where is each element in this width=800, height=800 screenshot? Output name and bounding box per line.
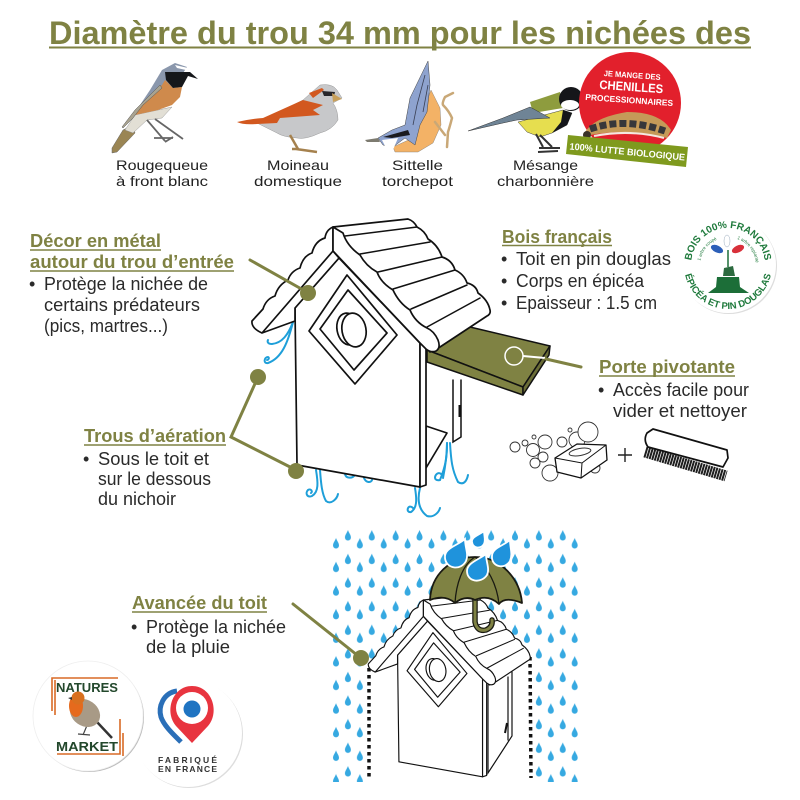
- pivoting door: [427, 327, 550, 395]
- callout: avancée du toit: Protège la nichée: [146, 617, 286, 637]
- bird: sittelle torchepot: [365, 61, 453, 152]
- callout: décor en métal: Décor en métal: [30, 231, 161, 251]
- badge: bois 100% français: 1 arbre coupé: [698, 237, 716, 260]
- callout: porte pivotante: [598, 357, 749, 421]
- badge: bois 100% français: 1 arbre replanté: [738, 236, 759, 262]
- badge: bois 100% français: ÉPICÉA ET PIN DOUGLAS: [685, 273, 770, 309]
- icon: soap and bubbles: [510, 422, 607, 481]
- leader: porte pivotante: [505, 347, 581, 367]
- badge text: PROCESSIONNAIRES: [585, 92, 674, 108]
- label: Rougequeue à front blanc: Rougequeue: [116, 157, 208, 173]
- callout: porte pivotante: •: [598, 380, 604, 400]
- callout: décor en métal: •: [29, 274, 35, 294]
- plus sign: [618, 448, 632, 462]
- label: Rougequeue à front blanc: à front blanc: [116, 173, 208, 189]
- badge: bois 100% français: [684, 221, 777, 314]
- callout: trous d'aération: •: [83, 449, 89, 469]
- icon: brush: [645, 429, 728, 476]
- callout: porte pivotante: vider et nettoyer: [613, 401, 747, 421]
- umbrella: [430, 557, 522, 630]
- label: Mésange charbonnière: [497, 157, 594, 189]
- callout: trous d'aération: [83, 426, 226, 509]
- orange frame: [52, 678, 123, 756]
- leader: avancée du toit: [293, 604, 369, 666]
- label: Rougequeue à front blanc: [116, 157, 208, 189]
- callout: décor en métal: certains prédateurs: [44, 295, 200, 315]
- callout: bois français: Toit en pin douglas: [516, 249, 671, 269]
- rain pattern: [330, 528, 581, 782]
- badge: fabriqué en france: FABRIQUÉ: [158, 755, 217, 765]
- callout: porte pivotante: Porte pivotante: [599, 357, 735, 377]
- badge: natures market: [33, 661, 144, 772]
- callout: décor en métal: Protège la nichée de: [44, 274, 208, 294]
- callout: décor en métal: [29, 231, 234, 336]
- callout: bois français: Corps en épicéa: [516, 271, 645, 291]
- badge: fabriqué en france: EN FRANCE: [158, 764, 217, 774]
- label: Sittelle torchepot: torchepot: [382, 173, 453, 189]
- banner: 100% lutte biologique: 100% LUTTE BIOLOGIQUE: [569, 141, 685, 164]
- callout: décor en métal: (pics, martres...): [44, 316, 168, 336]
- label: Sittelle torchepot: [382, 157, 453, 189]
- badge text: [585, 69, 674, 108]
- badge: fabriqué en france: [134, 679, 243, 788]
- label: Moineau domestique: [254, 157, 342, 189]
- callout: trous d'aération: sur le dessous: [98, 469, 211, 489]
- label: Moineau domestique: domestique: [254, 173, 342, 189]
- callout: avancée du toit: [131, 593, 286, 657]
- callout: bois français: •: [501, 249, 507, 269]
- caterpillar: [583, 112, 671, 139]
- callout: trous d'aération: du nichoir: [98, 489, 176, 509]
- label: Moineau domestique: Moineau: [267, 157, 329, 173]
- callout: décor en métal: autour du trou d’entrée: [30, 252, 234, 272]
- badge text: CHENILLES: [599, 78, 664, 96]
- leader: décor: [250, 260, 316, 301]
- callout: bois français: Epaisseur : 1.5 cm: [516, 293, 657, 313]
- callout: bois français: Bois français: [502, 227, 612, 247]
- callout: porte pivotante: Accès facile pour: [613, 380, 749, 400]
- bird: moineau domestique: [237, 85, 342, 152]
- badge: natures market: NATURES: [56, 681, 118, 695]
- badge: chenilles processionnaires: [566, 52, 688, 167]
- icon: big rain drops: [445, 531, 511, 581]
- callout: bois français: •: [501, 293, 507, 313]
- callout: avancée du toit: de la pluie: [146, 637, 230, 657]
- leader: trous d'aération: [231, 369, 304, 479]
- callout: bois français: •: [501, 271, 507, 291]
- label: Mésange charbonnière: charbonnière: [497, 173, 594, 189]
- bird: mésange charbonnière: [468, 87, 589, 152]
- callout: trous d'aération: Sous le toit et: [98, 449, 209, 469]
- label: Mésange charbonnière: Mésange: [513, 157, 578, 173]
- callout: trous d'aération: Trous d’aération: [84, 426, 226, 446]
- side wall: [426, 380, 461, 468]
- badge: natures market: MARKET: [56, 740, 118, 754]
- badge: bois 100% français: BOIS 100% FRANÇAIS: [684, 221, 772, 260]
- title: Diamètre du trou 34 mm pour les nichées des: [49, 15, 751, 51]
- small birdhouse: [368, 595, 530, 777]
- icon: robin: [64, 692, 112, 738]
- callout: avancée du toit: Avancée du toit: [132, 593, 267, 613]
- house body and roof: [252, 219, 490, 487]
- icon: tree stump: [708, 235, 749, 293]
- label: Sittelle torchepot: Sittelle: [392, 157, 443, 173]
- bird: rougequeue à front blanc: [112, 63, 198, 153]
- callout: avancée du toit: •: [131, 617, 137, 637]
- blue ventilation curls: [265, 322, 468, 516]
- callout: bois français: [501, 227, 671, 313]
- dotted overhang lines: [369, 657, 531, 778]
- icon: map pin: [160, 686, 214, 743]
- badge text: JE MANGE DES: [603, 69, 662, 82]
- birdhouse with open door: [252, 219, 550, 516]
